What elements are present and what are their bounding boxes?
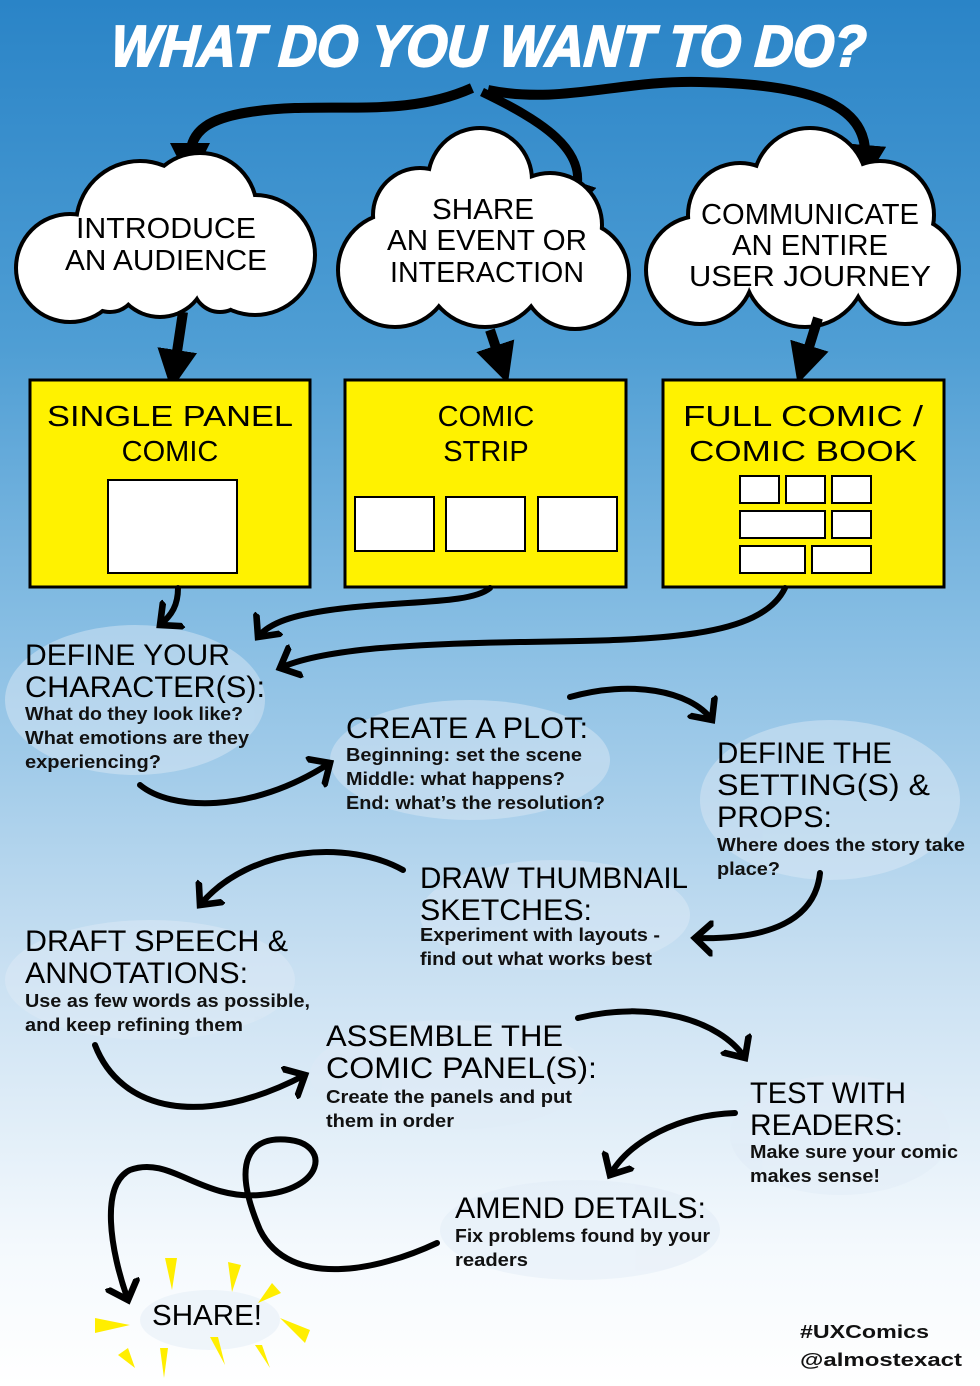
step: define characters: CHARACTER(S): xyxy=(25,671,265,704)
cloud: share an event xyxy=(340,130,627,327)
step: define characters: DEFINE YOUR xyxy=(25,639,230,672)
step: define characters: experiencing? xyxy=(25,752,161,772)
step: assemble: COMIC PANEL(S): xyxy=(326,1052,597,1085)
panel: comic strip xyxy=(345,380,626,587)
panel: single panel comic: COMIC xyxy=(122,436,218,468)
step: speech: DRAFT SPEECH & xyxy=(25,925,288,958)
arrow to speech xyxy=(200,852,403,905)
faint cloud backdrops xyxy=(5,625,960,1350)
arrows clouds to boxes xyxy=(175,312,818,365)
step: create a plot: Beginning: set the scene xyxy=(346,745,582,765)
step: thumbnails: SKETCHES: xyxy=(420,894,592,927)
arrows from title xyxy=(190,82,865,195)
arrow to thumbnails xyxy=(695,873,820,938)
cloud: communicate journey xyxy=(648,130,957,325)
step: define setting: Where does the story take xyxy=(717,835,965,855)
arrow to amend xyxy=(610,1113,735,1175)
cloud: share an event: AN EVENT OR xyxy=(387,225,587,257)
credits: @almostexact xyxy=(800,1350,962,1370)
step: create a plot: End: what’s the resolution? xyxy=(346,793,605,813)
step: define characters: What do they look like? xyxy=(25,704,243,724)
step: thumbnails: DRAW THUMBNAIL xyxy=(420,862,688,895)
cloud: communicate journey: COMMUNICATE xyxy=(701,199,919,231)
step: assemble xyxy=(326,1020,597,1131)
step: speech: and keep refining them xyxy=(25,1015,243,1035)
panel: single panel comic xyxy=(30,380,310,587)
credits: #UXComics xyxy=(800,1322,929,1342)
cloud: share an event: SHARE xyxy=(432,194,534,226)
credits xyxy=(800,1322,962,1370)
step: create a plot: Middle: what happens? xyxy=(346,769,565,789)
arrows: boxes to define characters xyxy=(160,588,785,668)
arrow to plot xyxy=(140,763,330,803)
panel: comic strip: STRIP xyxy=(443,436,529,468)
step: test: makes sense! xyxy=(750,1166,880,1186)
panel: full comic book xyxy=(663,380,944,587)
step: amend xyxy=(455,1192,710,1270)
step: define characters xyxy=(25,639,265,772)
step: thumbnails: Experiment with layouts - xyxy=(420,925,660,945)
step: create a plot xyxy=(346,712,605,813)
title: WHAT DO YOU WANT TO DO? xyxy=(109,14,869,79)
share burst: SHARE! xyxy=(152,1300,262,1332)
step: create a plot: CREATE A PLOT: xyxy=(346,712,588,745)
step: define setting: place? xyxy=(717,859,780,879)
step: speech: Use as few words as possible, xyxy=(25,991,310,1011)
step: amend: AMEND DETAILS: xyxy=(455,1192,706,1225)
loopy arrow to share xyxy=(111,1139,437,1300)
panel: single panel comic: SINGLE PANEL xyxy=(47,401,293,433)
step: assemble: Create the panels and put xyxy=(326,1087,572,1107)
cloud: share an event: INTERACTION xyxy=(390,257,584,289)
step: define setting: SETTING(S) & xyxy=(717,769,930,802)
step: test xyxy=(750,1077,958,1186)
step: test: Make sure your comic xyxy=(750,1142,958,1162)
step: test: READERS: xyxy=(750,1109,903,1142)
step: speech xyxy=(25,925,310,1035)
step: amend: readers xyxy=(455,1250,528,1270)
cloud: introduce an audience xyxy=(18,155,313,320)
step: define setting xyxy=(717,737,965,879)
step: define setting: DEFINE THE xyxy=(717,737,892,770)
panel: comic strip: COMIC xyxy=(438,401,534,433)
step: speech: ANNOTATIONS: xyxy=(25,957,248,990)
panel: full comic book: FULL COMIC / xyxy=(683,401,924,433)
step: thumbnails: find out what works best xyxy=(420,949,652,969)
step: define characters: What emotions are they xyxy=(25,728,249,748)
step: test: TEST WITH xyxy=(750,1077,906,1110)
step: define setting: PROPS: xyxy=(717,801,832,834)
arrow to assemble xyxy=(95,1045,305,1107)
arrow to setting xyxy=(570,689,712,720)
cloud: communicate journey: AN ENTIRE xyxy=(732,230,888,262)
step: amend: Fix problems found by your xyxy=(455,1226,710,1246)
step: assemble: ASSEMBLE THE xyxy=(326,1020,563,1053)
panel: full comic book: COMIC BOOK xyxy=(689,436,918,468)
step: thumbnails xyxy=(420,862,688,969)
step: assemble: them in order xyxy=(326,1111,454,1131)
share burst xyxy=(95,1258,310,1378)
cloud: introduce an audience: INTRODUCE xyxy=(76,213,256,245)
arrow to test xyxy=(578,1011,745,1058)
cloud: communicate journey: USER JOURNEY xyxy=(689,261,931,293)
cloud: introduce an audience: AN AUDIENCE xyxy=(65,245,267,277)
